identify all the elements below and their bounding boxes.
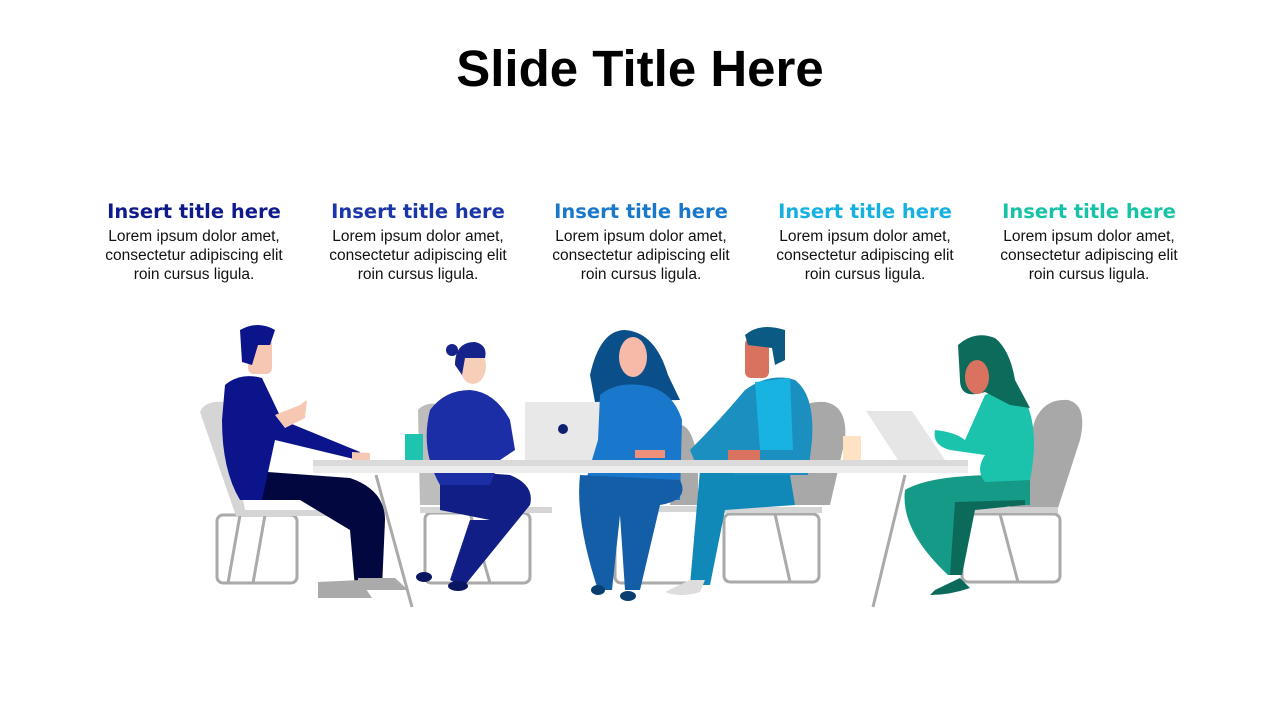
laptop xyxy=(525,402,602,460)
table xyxy=(313,460,968,607)
text block 3 xyxy=(552,200,730,283)
text block 3: Lorem ipsum dolor amet, consectetur adipiscing elit roin cursus ligula. xyxy=(552,228,730,283)
text block 5: Insert title here xyxy=(1002,200,1176,223)
title: Slide Title Here xyxy=(456,40,824,97)
chair 3 back xyxy=(625,425,710,512)
chair 4 xyxy=(722,402,845,513)
person 5 xyxy=(905,335,1034,595)
chairs frames xyxy=(217,515,297,583)
person 4 xyxy=(665,327,861,595)
person 2 xyxy=(405,342,531,591)
chair 5 xyxy=(946,400,1082,513)
laptop 2 xyxy=(866,411,945,460)
chair 1 xyxy=(200,402,335,516)
text block 4: Insert title here xyxy=(778,200,952,223)
text block 4 xyxy=(776,200,954,283)
text block 2 xyxy=(329,200,507,283)
text block 1 xyxy=(105,200,283,283)
text block 2: Lorem ipsum dolor amet, consectetur adipiscing elit roin cursus ligula. xyxy=(329,228,507,283)
person 1 xyxy=(222,325,408,598)
text block 5 xyxy=(1000,200,1178,283)
person 3 xyxy=(579,330,682,601)
text block 1: Insert title here xyxy=(107,200,281,223)
text block 4: Lorem ipsum dolor amet, consectetur adipiscing elit roin cursus ligula. xyxy=(776,228,954,283)
text block 3: Insert title here xyxy=(554,200,728,223)
chair 2 xyxy=(418,404,552,513)
text block 2: Insert title here xyxy=(331,200,505,223)
text block 5: Lorem ipsum dolor amet, consectetur adipiscing elit roin cursus ligula. xyxy=(1000,228,1178,283)
text block 1: Lorem ipsum dolor amet, consectetur adipiscing elit roin cursus ligula. xyxy=(105,228,283,283)
